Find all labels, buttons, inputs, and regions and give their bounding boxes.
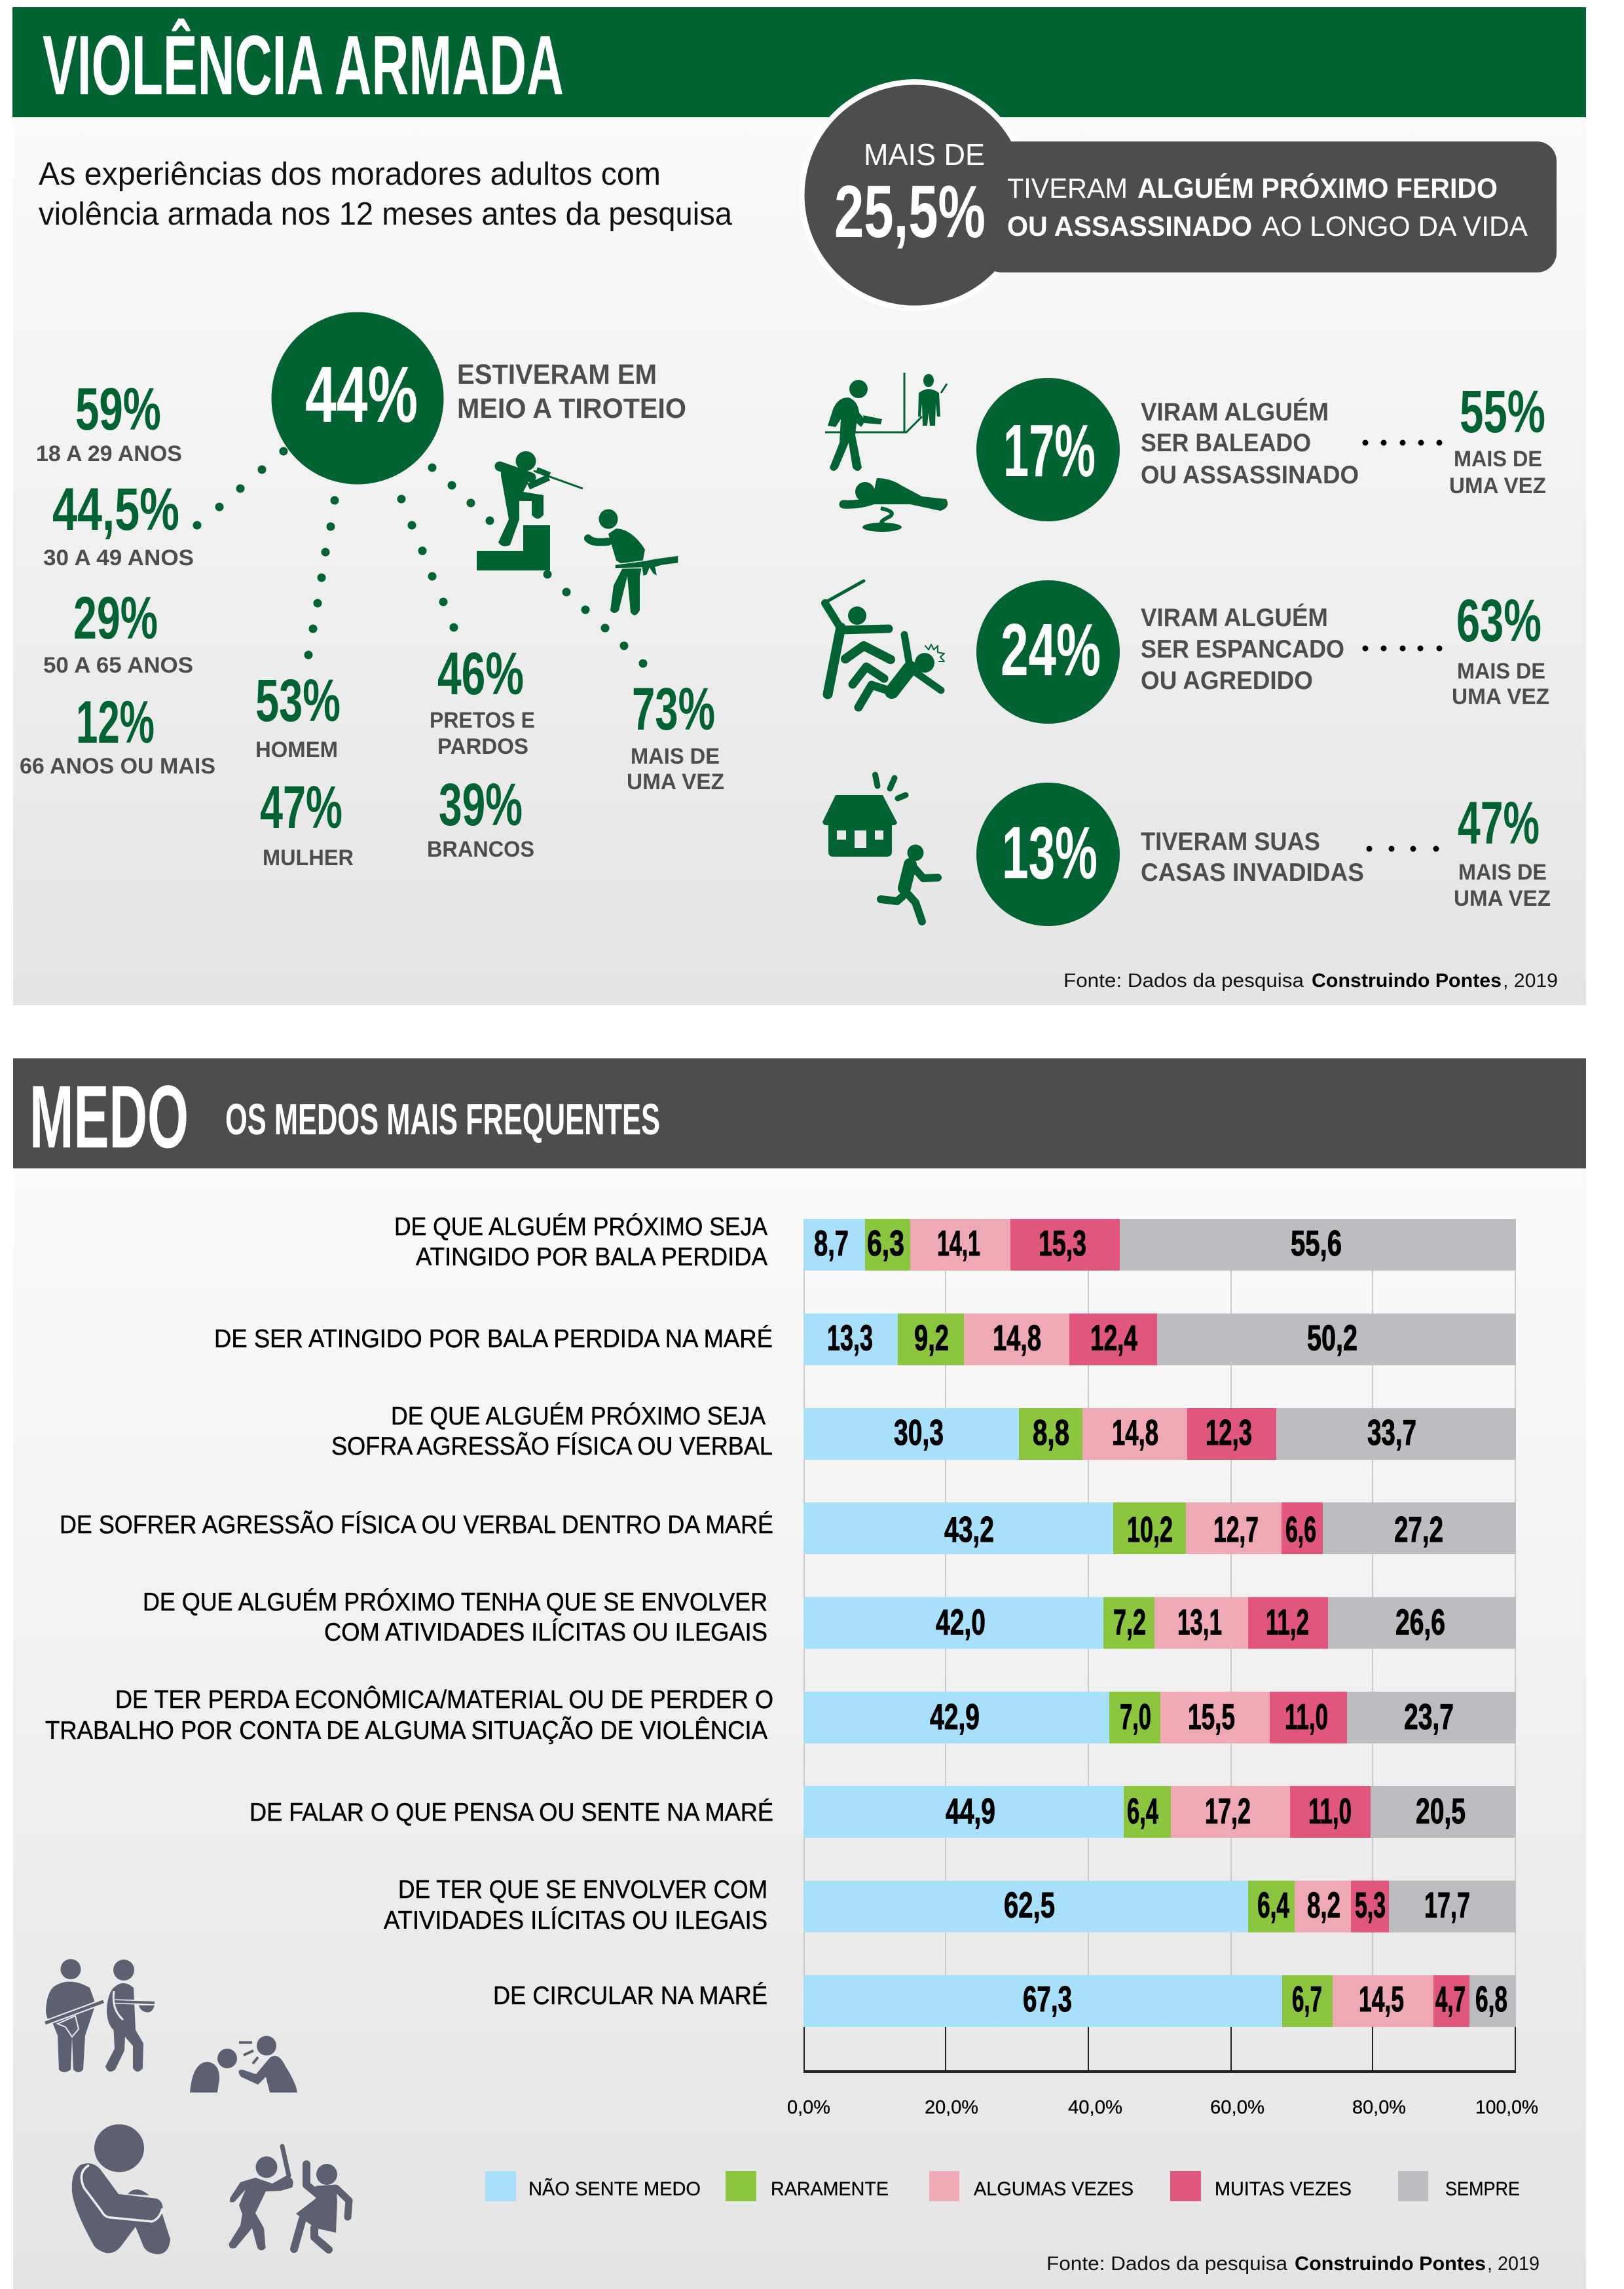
age breakdown [20, 376, 215, 779]
stat row: 17%: VIRAM ALGUÉM [1141, 398, 1329, 426]
icon: gunman with rifle [588, 510, 678, 615]
row 9: DE CIRCULAR NA MARÉ [493, 1982, 767, 2010]
row 2: 50,2 [1307, 1318, 1357, 1358]
row 8: 62,5 [1004, 1885, 1055, 1926]
icon: shouting pair [190, 2036, 297, 2093]
callout: mais de 25,5%: AO LONGO DA VIDA [1262, 211, 1528, 242]
dotted connectors [193, 447, 647, 668]
row 3 [331, 1402, 1516, 1461]
big stat: 44% [271, 312, 444, 485]
icon: shooter and victim [825, 373, 948, 532]
row 8: DE TER QUE SE ENVOLVER COM [398, 1876, 767, 1904]
stat row: 24%: OU AGREDIDO [1141, 667, 1313, 695]
gender breakdown [255, 667, 354, 870]
stat row: 24%: 63% [1456, 587, 1541, 654]
axis labels: 0,0% [787, 2097, 830, 2118]
intro text: violência armada nos 12 meses antes da pesquisa [39, 196, 733, 232]
row 1: ATINGIDO POR BALA PERDIDA [416, 1243, 767, 1271]
text: estiveram em meio a tiroteio: MEIO A TIROTEIO [457, 393, 686, 424]
row 2: DE SER ATINGIDO POR BALA PERDIDA NA MARÉ [214, 1325, 773, 1353]
legend: MUITAS VEZES [1215, 2178, 1352, 2200]
legend: RARAMENTE [771, 2178, 889, 2200]
row 1: 14,1 [937, 1223, 980, 1263]
age breakdown: 29% [73, 585, 158, 652]
stat row: 24%: SER ESPANCADO [1141, 635, 1344, 663]
stat row: 17%: UMA VEZ [1449, 474, 1546, 498]
legend [485, 2171, 1520, 2201]
row 5: 11,2 [1266, 1602, 1309, 1643]
row 7: 44,9 [946, 1791, 995, 1831]
stat row: 24%: 24% [1001, 608, 1101, 691]
icon: invaded house and runner [822, 775, 938, 921]
row 7: 20,5 [1416, 1791, 1466, 1831]
icon: sniper on steps [477, 451, 583, 570]
stat row: 13%: MAIS DE [1458, 860, 1547, 885]
stat row: 24%: VIRAM ALGUÉM [1141, 603, 1328, 632]
row 6: 11,0 [1285, 1696, 1328, 1737]
row 8: 6,4 [1257, 1885, 1289, 1926]
row 7: 17,2 [1205, 1791, 1251, 1831]
stat row: 24% [976, 580, 1549, 724]
icon: sitting scared person [72, 2125, 170, 2254]
row 6: TRABALHO POR CONTA DE ALGUMA SITUAÇÃO DE VIOLÊNCIA [45, 1717, 767, 1745]
axis labels: 20,0% [925, 2097, 978, 2118]
row 9 [493, 1975, 1516, 2027]
row 8 [384, 1876, 1516, 1935]
row 3: 33,7 [1367, 1412, 1416, 1453]
race breakdown: 39% [439, 772, 523, 838]
intro text: As experiências dos moradores adultos com [39, 157, 661, 192]
source note: Construindo Pontes [1312, 970, 1502, 992]
row 3: DE QUE ALGUÉM PRÓXIMO SEJA [391, 1402, 766, 1430]
row 4 [60, 1502, 1516, 1554]
race breakdown: PARDOS [437, 734, 528, 759]
subheading: OS MEDOS MAIS FREQUENTES [225, 1095, 660, 1144]
row 5: 13,1 [1177, 1602, 1222, 1643]
gender breakdown: HOMEM [255, 737, 338, 762]
age breakdown: 44,5% [52, 476, 179, 543]
source note: , 2019 [1503, 970, 1558, 992]
race breakdown: PRETOS E [430, 708, 535, 733]
row 3: 14,8 [1112, 1412, 1158, 1453]
callout: mais de 25,5%: MAIS DE [864, 138, 985, 172]
stat row: 17%: MAIS DE [1454, 447, 1542, 472]
row 1 [394, 1213, 1516, 1271]
age breakdown: 66 ANOS OU MAIS [20, 754, 215, 779]
stat: 73% more than once [627, 676, 724, 794]
row 3: 30,3 [894, 1412, 944, 1453]
row 1: 55,6 [1291, 1223, 1342, 1263]
row 4: 43,2 [944, 1509, 994, 1550]
row 7: 11,0 [1308, 1791, 1352, 1831]
source note [1063, 970, 1558, 992]
source note: Construindo Pontes [1295, 2253, 1486, 2275]
age breakdown: 30 A 49 ANOS [43, 546, 194, 570]
panel: medo [13, 1058, 1586, 2289]
row 4: 10,2 [1127, 1509, 1173, 1550]
icon: person attacking with stick [229, 2146, 349, 2250]
race breakdown: BRANCOS [427, 837, 534, 862]
row 1: 8,7 [814, 1223, 849, 1263]
row 7: 6,4 [1127, 1791, 1158, 1831]
stat: 73% more than once: UMA VEZ [627, 770, 724, 794]
row 6: DE TER PERDA ECONÔMICA/MATERIAL OU DE PERDER O [115, 1685, 773, 1714]
race breakdown: 46% [437, 641, 524, 707]
row 4: DE SOFRER AGRESSÃO FÍSICA OU VERBAL DENTRO DA MARÉ [60, 1511, 773, 1539]
heading: medo: MEDO [29, 1067, 189, 1166]
row 7 [249, 1786, 1516, 1838]
source note [1046, 2253, 1540, 2275]
stat row: 13%: UMA VEZ [1454, 886, 1551, 911]
race breakdown [427, 641, 535, 862]
row 5: 7,2 [1113, 1602, 1146, 1643]
axis labels: 60,0% [1210, 2097, 1264, 2118]
age breakdown: 59% [75, 376, 161, 443]
callout: mais de 25,5% [799, 79, 1557, 311]
big stat: 44%: 44% [305, 350, 418, 439]
stat row: 24%: UMA VEZ [1452, 684, 1549, 709]
legend: ALGUMAS VEZES [974, 2178, 1134, 2200]
stat row: 13%: 47% [1458, 790, 1540, 857]
gender breakdown: 47% [260, 774, 342, 841]
row 8: 17,7 [1424, 1885, 1470, 1926]
row 3: SOFRA AGRESSÃO FÍSICA OU VERBAL [331, 1432, 773, 1461]
gender breakdown: 53% [255, 667, 341, 734]
row 6: 42,9 [930, 1696, 980, 1737]
row 1: DE QUE ALGUÉM PRÓXIMO SEJA [394, 1213, 767, 1241]
stat row: 24%: MAIS DE [1457, 659, 1545, 684]
stat: 73% more than once: MAIS DE [631, 744, 720, 769]
row 1: 6,3 [867, 1223, 904, 1263]
row 4: 6,6 [1285, 1509, 1316, 1550]
row 1: 15,3 [1039, 1223, 1086, 1263]
axis labels: 100,0% [1475, 2097, 1538, 2118]
row 4: 27,2 [1394, 1509, 1443, 1550]
age breakdown: 18 A 29 ANOS [36, 441, 182, 466]
source note: Fonte: Dados da pesquisa [1063, 970, 1304, 992]
row 2: 14,8 [993, 1318, 1041, 1358]
axis labels [787, 2097, 1538, 2118]
row 5 [143, 1588, 1516, 1649]
axis labels: 80,0% [1352, 2097, 1406, 2118]
stat row: 13% [976, 783, 1551, 926]
text: estiveram em meio a tiroteio: ESTIVERAM EM [457, 359, 657, 390]
row 7: DE FALAR O QUE PENSA OU SENTE NA MARÉ [249, 1798, 773, 1827]
row 9: 14,5 [1359, 1979, 1404, 2019]
row 6: 23,7 [1404, 1696, 1454, 1737]
stat row: 13%: TIVERAM SUAS [1141, 828, 1320, 856]
row 8: 8,2 [1307, 1885, 1340, 1926]
bar chart: fears [45, 1213, 1538, 2118]
title: VIOLÊNCIA ARMADA [43, 18, 564, 113]
age breakdown: 12% [76, 689, 155, 756]
callout: mais de 25,5%: ALGUÉM PRÓXIMO FERIDO [1137, 172, 1498, 204]
gender breakdown: MULHER [263, 846, 354, 870]
icon: beating scene [824, 581, 944, 707]
source note: Fonte: Dados da pesquisa [1046, 2253, 1287, 2275]
row 3: 12,3 [1206, 1412, 1252, 1453]
row 9: 6,7 [1292, 1979, 1322, 2019]
row 5: COM ATIVIDADES ILÍCITAS OU ILEGAIS [324, 1618, 767, 1647]
row 5: DE QUE ALGUÉM PRÓXIMO TENHA QUE SE ENVOLVER [143, 1588, 767, 1616]
row 9: 6,8 [1475, 1979, 1507, 2019]
axis labels: 40,0% [1068, 2097, 1122, 2118]
callout: mais de 25,5%: TIVERAM [1007, 173, 1128, 204]
legend: NÃO SENTE MEDO [528, 2178, 701, 2200]
icon: two armed men [45, 1959, 155, 2072]
stat row: 17%: SER BALEADO [1141, 429, 1311, 457]
header banner: violência armada [12, 7, 1586, 117]
legend: SEMPRE [1445, 2178, 1520, 2200]
row 6 [45, 1685, 1516, 1745]
source note: , 2019 [1487, 2253, 1540, 2275]
row 8: 5,3 [1355, 1885, 1386, 1926]
stat row: 13%: 13% [1002, 811, 1098, 894]
stat: 73% more than once: 73% [632, 676, 715, 743]
row 5: 26,6 [1395, 1602, 1445, 1643]
row 6: 7,0 [1120, 1696, 1151, 1737]
stat row: 17% [976, 378, 1546, 521]
row 6: 15,5 [1188, 1696, 1235, 1737]
row 9: 4,7 [1435, 1979, 1466, 2019]
row 8: ATIVIDADES ILÍCITAS OU ILEGAIS [384, 1907, 767, 1935]
age breakdown: 50 A 65 ANOS [43, 653, 193, 678]
text: estiveram em meio a tiroteio [457, 359, 686, 424]
callout: mais de 25,5%: OU ASSASSINADO [1007, 211, 1252, 242]
row 2: 9,2 [914, 1318, 949, 1358]
stat row: 13%: CASAS INVADIDAS [1141, 859, 1364, 887]
callout: mais de 25,5%: 25,5% [834, 170, 986, 253]
header banner: medo [13, 1058, 1586, 1168]
row 2 [214, 1314, 1516, 1365]
stat row: 17%: OU ASSASSINADO [1141, 461, 1359, 489]
stat row: 17%: 55% [1460, 379, 1545, 445]
stat row: 17%: 17% [1003, 409, 1096, 492]
row 4: 12,7 [1213, 1509, 1259, 1550]
intro text [39, 157, 733, 232]
row 2: 12,4 [1090, 1318, 1137, 1358]
row 5: 42,0 [936, 1602, 986, 1643]
row 2: 13,3 [827, 1318, 873, 1358]
row 3: 8,8 [1033, 1412, 1069, 1453]
row 9: 67,3 [1023, 1979, 1072, 2019]
panel: violência armada [12, 7, 1586, 1005]
